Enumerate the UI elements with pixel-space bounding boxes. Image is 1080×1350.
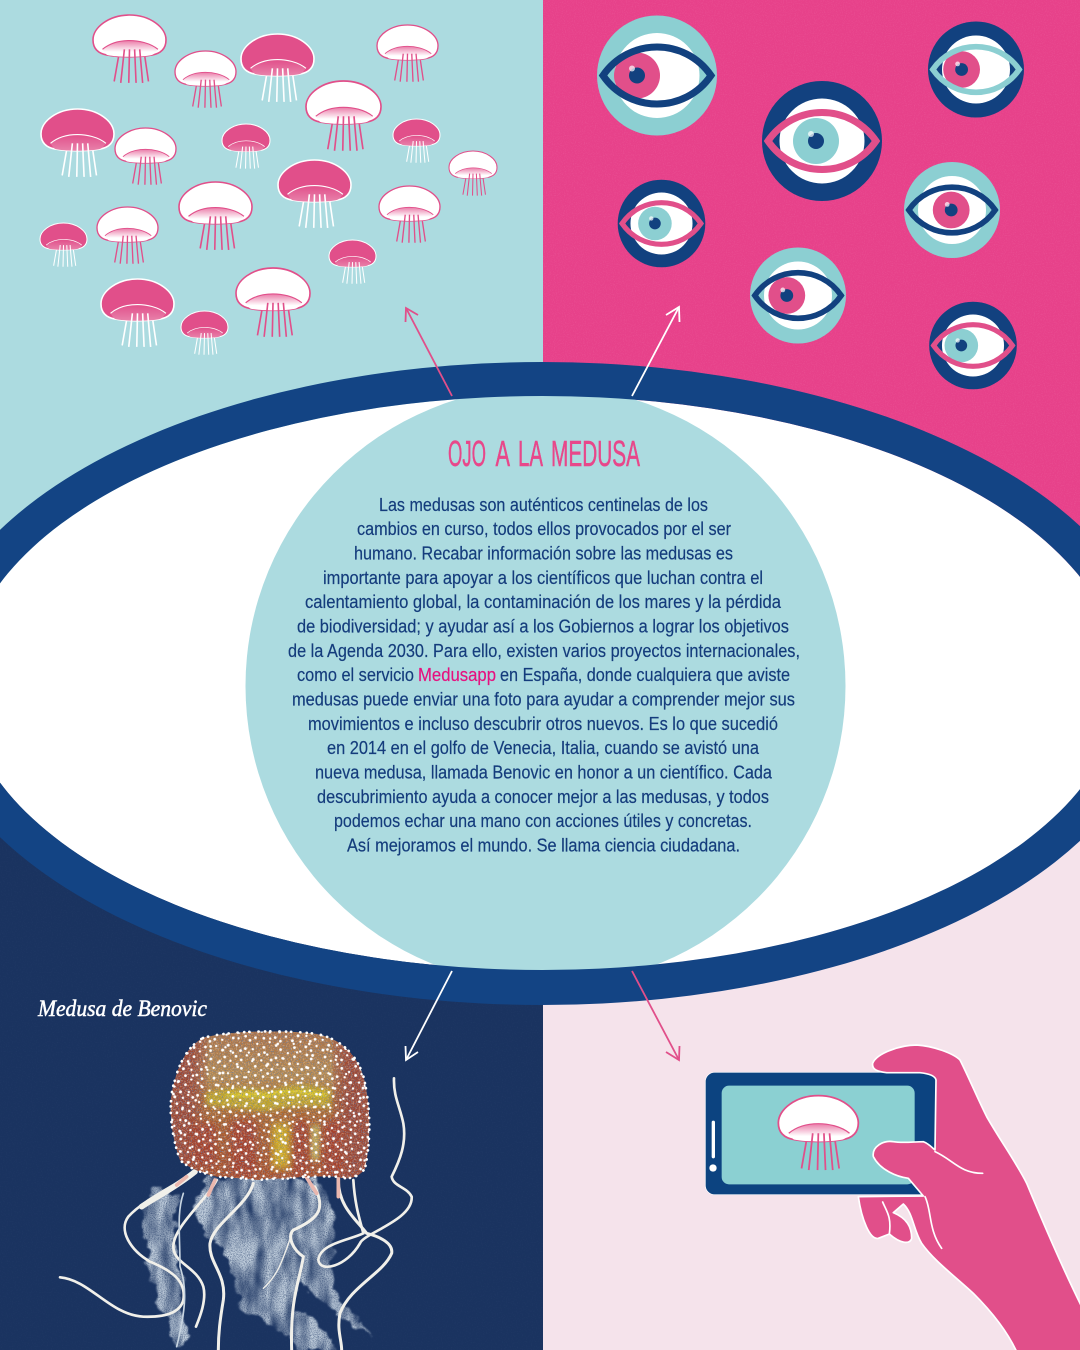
jellyfish 4	[377, 25, 438, 82]
jellyfish 9	[393, 119, 440, 163]
arrow to Benovic jellyfish	[406, 971, 452, 1060]
body text: cambios en curso, todos ellos provocados por el ser	[357, 518, 731, 539]
jellyfish 14	[97, 207, 158, 264]
panel: phone photographing a jellyfish	[543, 680, 1080, 1350]
jellyfish 3	[241, 34, 314, 102]
central circle	[246, 386, 846, 986]
phone body	[705, 1072, 936, 1195]
body text: podemos echar una mano con acciones útiles y concretas.	[334, 810, 752, 831]
illustration: Benovic jellyfish	[60, 1027, 412, 1350]
jellyfish 11	[278, 160, 351, 228]
title: OJO	[448, 433, 486, 474]
phone button	[709, 1164, 717, 1172]
eye 4	[618, 180, 705, 267]
body text: como el servicio	[297, 664, 414, 685]
body text: de la Agenda 2030. Para ello, existen varios proyectos internacionales,	[288, 640, 800, 661]
body text: de biodiversidad; y ayudar así a los Gobiernos a lograr los objetivos	[297, 616, 789, 636]
phone speaker slit	[712, 1121, 715, 1158]
tentacle mist	[145, 1175, 373, 1350]
jellyfish 13	[379, 186, 440, 243]
body text: en España, donde cualquiera que aviste	[500, 664, 790, 685]
body text: humano. Recabar información sobre las medusas es	[354, 542, 733, 564]
jellyfish 17	[236, 268, 310, 337]
jellyfish on screen	[778, 1096, 858, 1170]
jellyfish 6	[41, 109, 114, 177]
jellyfish 5	[306, 81, 381, 151]
jellyfish 19	[181, 311, 228, 355]
jellyfish 10	[449, 151, 497, 196]
phone screen	[722, 1086, 915, 1184]
title: A	[496, 433, 510, 474]
eye 1	[597, 16, 717, 136]
title	[448, 433, 640, 474]
caption: Medusa de Benovic: Medusa de Benovic	[37, 996, 207, 1021]
body text: movimientos e incluso descubrir otros nuevos. Es lo que sucedió	[308, 713, 778, 734]
eye 7	[929, 302, 1017, 389]
eye outline ring	[0, 362, 1080, 1005]
panel: Benovic jellyfish illustration	[0, 783, 543, 1350]
jellyfish 7	[115, 128, 176, 185]
eye 3	[928, 22, 1024, 118]
body text: calentamiento global, la contaminación de los mares y la pérdida	[305, 591, 782, 612]
eye 2	[762, 81, 882, 201]
body text: en 2014 en el golfo de Venecia, Italia, cuando se avistó una	[327, 737, 760, 758]
body text	[288, 494, 800, 856]
arrow to eyes	[632, 307, 680, 396]
eye 5	[904, 162, 1000, 258]
body text: Así mejoramos el mundo. Se llama ciencia ciudadana.	[347, 834, 740, 856]
arrow to jellyfish swarm	[406, 308, 452, 396]
jellyfish 15	[40, 223, 87, 267]
body text: medusas puede enviar una foto para ayudar a comprender mejor sus	[292, 688, 795, 710]
title: MEDUSA	[551, 433, 640, 474]
jellyfish 8	[222, 124, 270, 169]
hand	[858, 1045, 1080, 1350]
bell	[170, 1031, 370, 1180]
panel: jellyfish swarm	[0, 0, 543, 690]
jellyfish 18	[101, 279, 174, 347]
title: LA	[518, 433, 543, 474]
phone and hand	[705, 1045, 1080, 1350]
eye 6	[750, 248, 846, 344]
jellyfish 1	[93, 15, 166, 83]
jellyfish 12	[179, 182, 252, 250]
jellyfish 2	[175, 51, 236, 108]
tentacles	[60, 1078, 412, 1350]
body text: importante para apoyar a los científicos que luchan contra el	[323, 567, 763, 588]
arrow to phone	[632, 971, 680, 1060]
panel: watching eyes	[543, 0, 1080, 690]
eye shape: white sclera	[0, 396, 1080, 970]
jellyfish 16	[329, 240, 376, 284]
body text: nueva medusa, llamada Benovic en honor a un científico. Cada	[315, 762, 773, 782]
highlighted word: Medusapp: Medusapp	[418, 664, 496, 685]
body text: descubrimiento ayuda a conocer mejor a las medusas, y todos	[317, 786, 769, 807]
body text: Las medusas son auténticos centinelas de los	[379, 494, 708, 515]
